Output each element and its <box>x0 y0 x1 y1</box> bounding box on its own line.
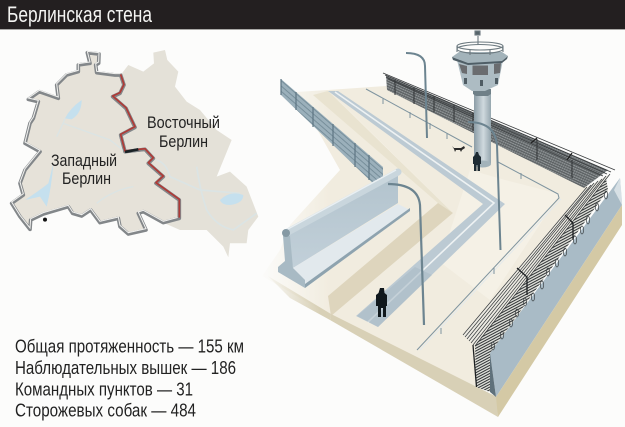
ground surface <box>262 86 590 397</box>
L-shaped inner wall <box>278 170 410 288</box>
label: East Berlin: Восточный <box>147 114 220 132</box>
back-left panel fence <box>281 79 383 193</box>
handrail <box>366 89 561 350</box>
map: East Berlin area <box>113 50 258 257</box>
statistics text block: Общая протяженность — 155 км <box>15 336 244 356</box>
sand strip beside wall <box>496 205 622 417</box>
guard by the tower <box>473 152 481 171</box>
map: West Berlin area <box>12 51 179 234</box>
guard tower <box>452 31 508 168</box>
label: West Berlin: Берлин <box>62 170 111 188</box>
concrete outer wall <box>488 178 622 397</box>
guard on patrol road <box>376 288 387 317</box>
hatched fence and overhang <box>463 174 610 392</box>
statistics text block: Командных пунктов — 31 <box>15 380 193 400</box>
tower shaft <box>473 89 491 168</box>
statistics text block <box>15 336 244 420</box>
street lamp 1 <box>406 53 427 138</box>
label: West Berlin: Западный <box>51 152 117 170</box>
street lamp 3 <box>388 184 424 325</box>
ditch slope <box>313 91 453 316</box>
street lamp 2 <box>468 122 500 250</box>
earth cut <box>268 276 498 417</box>
razor wire coils <box>491 191 608 350</box>
label: West Berlin <box>51 152 117 188</box>
tower cabin <box>452 52 508 91</box>
statistics text block: Сторожевых собак — 484 <box>15 400 196 420</box>
tower railing and camera <box>457 31 503 55</box>
back chain-link fence <box>383 73 615 188</box>
label: East Berlin <box>147 114 220 151</box>
statistics text block: Наблюдательных вышек — 186 <box>15 358 236 378</box>
header bar with title <box>0 0 625 30</box>
label: East Berlin: Берлин <box>159 133 208 151</box>
map of Berlin <box>12 50 258 257</box>
guard dog <box>452 146 465 152</box>
border strip illustration <box>262 31 622 417</box>
header bar with title: Берлинская стена <box>7 2 152 27</box>
patrol road <box>328 91 505 327</box>
